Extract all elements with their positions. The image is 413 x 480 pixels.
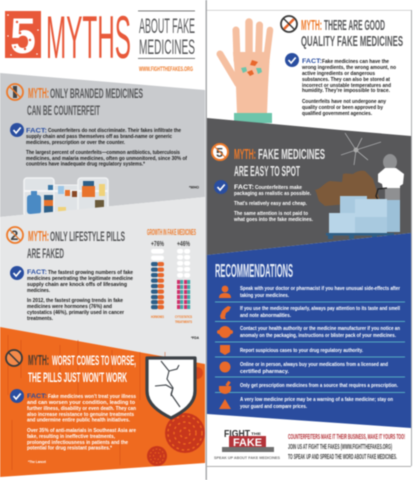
illustration: worker with pallet of boxes: [315, 154, 404, 239]
chart: growth in fake medicines: HORMONES: [151, 314, 164, 319]
panel: myth 4 good quality fakes: [220, 16, 403, 123]
heading: myth 1: MYTH:: [28, 85, 49, 102]
recommendation list: Online or in person, always buy your medications from a licensed and: [240, 362, 388, 368]
icon: myth 5 no symbol: [212, 144, 228, 160]
recommendation list: Only get prescription medicines from a source that requires a prescription.: [240, 383, 399, 389]
recommendation list: [240, 286, 401, 410]
infographic: 5 myths about fake medicines: GROWTH IN FAKE MEDICINES: [147, 228, 196, 237]
fact text: myth 4: quality control or been approved by: [302, 105, 383, 111]
fact text: myth 2: FACT:: [27, 269, 47, 276]
panel: myth 1 branded medicines: [0, 73, 205, 217]
logo: fight the fakes: SPEAK UP ABOUT FAKE MEDICINES: [214, 456, 281, 460]
illustration: medicine cabinet: [24, 178, 108, 217]
panel: myth 1 branded medicines: ONLY BRANDED MEDICINES: [50, 85, 143, 101]
fact text: myth 4: [301, 58, 396, 117]
icon: myth 4 no symbol: [281, 16, 297, 32]
fact text: myth 5: Counterfeiters make: [255, 185, 302, 191]
fact text: myth 1: [26, 128, 187, 168]
heading: myth 2: MYTH:: [28, 228, 49, 245]
icon: check mark: [10, 389, 24, 403]
fact text: myth 3: also increase resistance to genuine treatments: [27, 412, 134, 418]
recommendation list: taking your medicines.: [240, 293, 290, 299]
heading: myth 4: MYTH:: [301, 17, 322, 34]
fact text: myth 4: incorrect or unstable temperatures and: [302, 83, 391, 89]
heading: myth 3: THE PILLS JUST WON'T WORK: [28, 369, 127, 385]
icon: myth 2 no symbol: [7, 227, 23, 243]
chart: growth in fake medicines: TREATMENTS: [175, 319, 192, 324]
icon: check mark: [285, 53, 299, 67]
website link: WWW.FIGHTTHEFAKES.ORG: [139, 66, 193, 73]
fact text: myth 4: qualified government agencies.: [302, 111, 373, 117]
icons: recommendations: [217, 286, 233, 409]
panel: myth 2 lifestyle pills: [0, 197, 205, 364]
infographic: 5 myths about fake medicines: ABOUT FAKE: [139, 15, 195, 38]
chart: growth in fake medicines: +76%: [151, 241, 165, 248]
heading: myth 5: [234, 146, 325, 180]
source note: FDA: *FDA: [191, 336, 199, 340]
fact text: myth 5: FACT:: [234, 184, 254, 191]
header: MYTHS: [46, 4, 131, 71]
fact text: myth 1: Counterfeiters do not discriminate. Their fakes infiltrate the: [48, 128, 181, 134]
heading: myth 4: [301, 17, 403, 50]
fact text: myth 3: FACT:: [27, 393, 47, 400]
fact text: myth 3: potential for drug resistant parasites.*: [27, 446, 112, 452]
fact text: myth 3: prolonged infectiousness in patients and the: [27, 440, 128, 446]
bars: hormones: [151, 249, 164, 309]
fact text: myth 5: That's relatively easy and cheap.: [234, 201, 308, 207]
header: [5, 4, 195, 73]
icon: check mark: [10, 266, 24, 280]
fact text: myth 3: and can worsen your condition, leading to: [27, 400, 135, 406]
fact text: myth 1: supply chain and pass themselves off as brand-name or generic: [26, 134, 172, 140]
fact text: myth 3: Over 35% of anti-malarials in Southeast Asia are: [27, 428, 136, 434]
logo: fight the fakes: FIGHT: [224, 428, 250, 440]
source note: The Lancet: *The Lancet: [28, 460, 47, 464]
fact text: myth 4: humidity. They're impossible to trace.: [302, 88, 391, 94]
fact text: myth 1: medicines, prescription or over the counter.: [26, 140, 126, 146]
fact text: myth 1: medicines, and malaria medicines, often go unmonitored, since 30% of: [26, 156, 187, 162]
recommendation list: Report suspicious cases to your drug regulatory authority.: [240, 348, 364, 354]
logo: fight the fakes: [214, 428, 281, 460]
fact text: myth 5: what goes into the fake medicines.: [233, 217, 314, 223]
fact text: myth 2: treatments.: [27, 316, 54, 322]
recommendation list: your guard and compare prices.: [240, 404, 308, 410]
fact text: myth 4: wrong ingredients, the wrong amount, no: [301, 65, 396, 71]
heading: myth 3: MYTH:: [28, 352, 49, 369]
icon: myth 2 no symbol: 2: [10, 227, 18, 243]
fact text: myth 3: [27, 393, 136, 452]
heading: myth 5: FAKE MEDICINES: [258, 146, 325, 163]
heading: myth 5: MYTH:: [234, 146, 256, 163]
panel: recommendations: [207, 233, 411, 428]
fact text: myth 4: Counterfeits have not undergone any: [302, 99, 386, 105]
fact text: myth 2: supply chain are knock offs of lifesaving: [27, 282, 127, 288]
fact text: myth 3: and undermine entire public health initiatives.: [27, 418, 131, 424]
fact text: myth 2: [27, 269, 133, 322]
heading: myth 2: ARE FAKED: [27, 245, 64, 261]
recommendation list: anomaly on the packaging, instructions or blister pack of your medicines.: [240, 333, 397, 339]
call to action: [288, 432, 405, 461]
icon: number 5 block: 5: [10, 8, 36, 64]
illustration: hand holding pills: [220, 22, 272, 123]
heading: myth 5: ARE EASY TO SPOT: [234, 163, 300, 180]
panel: myth 2 lifestyle pills: ONLY LIFESTYLE PILLS: [50, 228, 125, 244]
logo: fight the fakes: FAKE: [233, 437, 262, 449]
fact text: myth 4: active ingredients or dangerous: [302, 71, 375, 77]
fact text: myth 2: cytostatics (46%), primarily used in cancer: [27, 310, 124, 316]
fact text: myth 4: FACT:: [302, 58, 322, 65]
fact text: myth 1: countries have inadequate drug regulatory systems.*: [26, 162, 145, 168]
fact text: myth 5: [233, 184, 314, 223]
illustration: cracked shield: [147, 358, 195, 418]
heading: myth 2: [27, 228, 125, 261]
icon: myth 5 no symbol: 5: [216, 145, 223, 160]
panel: myth 3 pills won't work: [0, 327, 205, 477]
fact text: myth 4: Fake medicines can have the: [322, 59, 389, 65]
heading: myth 3: [28, 352, 136, 385]
fact text: myth 2: medicines were hormones (76%) and: [27, 304, 112, 310]
logo: fight the fakes: THE: [251, 431, 261, 436]
fact text: myth 5: The same attention is not paid to: [234, 211, 308, 217]
fact text: myth 2: medicines.: [27, 288, 51, 294]
heading: myth 1: CAN BE COUNTERFEIT: [27, 102, 100, 118]
infographic: 5 myths about fake medicines: MEDICINES: [139, 36, 195, 59]
recommendation list: and note abnormalities.: [240, 313, 292, 319]
fact text: myth 3: Fake medicines won't treat your illness: [48, 394, 136, 400]
bars: cytostatics: [177, 249, 190, 309]
panel: recommendations: RECOMMENDATIONS: [215, 261, 293, 281]
icon: check mark: [10, 123, 24, 137]
fact text: myth 2: In 2012, the fastest growing trends in fake: [27, 298, 123, 304]
illustration: cracked glass starburst: [341, 133, 381, 165]
fact text: myth 2: The fastest growing numbers of fake: [48, 270, 133, 276]
chart: growth in fake medicines: +46%: [177, 241, 191, 248]
fact text: myth 2: medicines penetrating the legitimate medicine: [27, 276, 133, 282]
chart: growth in fake medicines: [147, 228, 196, 324]
heading: myth 1: [27, 85, 143, 118]
illustration: red dotted circles: [147, 367, 205, 466]
recommendation list: A very low medicine price may be a warning of a fake medicine; stay on: [240, 397, 393, 403]
icon: myth 3 no symbol: [6, 350, 22, 366]
source note: WHO: *WHO: [189, 186, 199, 190]
panel: myth 3 pills won't work: WORST COMES TO WORSE,: [52, 352, 136, 368]
title: about fake medicines: [138, 10, 195, 59]
fact text: myth 3: further illness, disability or even death. They can: [27, 406, 136, 412]
icon: check mark: [214, 180, 228, 194]
icon: myth 1 no symbol: [7, 84, 23, 100]
fact text: myth 4: substances. They can also be stored at: [302, 77, 390, 83]
recommendation list: certified pharmacy.: [240, 369, 290, 375]
panel: myth 5 easy to spot: [207, 118, 411, 255]
fact text: myth 1: The largest percent of counterfeits—common antibiotics, tuberculosis: [26, 150, 180, 156]
fact text: myth 3: fake, resulting in ineffective treatments,: [27, 434, 116, 440]
fact text: myth 1: FACT:: [26, 128, 47, 134]
fact text: myth 5: packaging as realistic as possible.: [234, 191, 312, 197]
chart: growth in fake medicines: CYTOSTATICS: [175, 314, 192, 319]
